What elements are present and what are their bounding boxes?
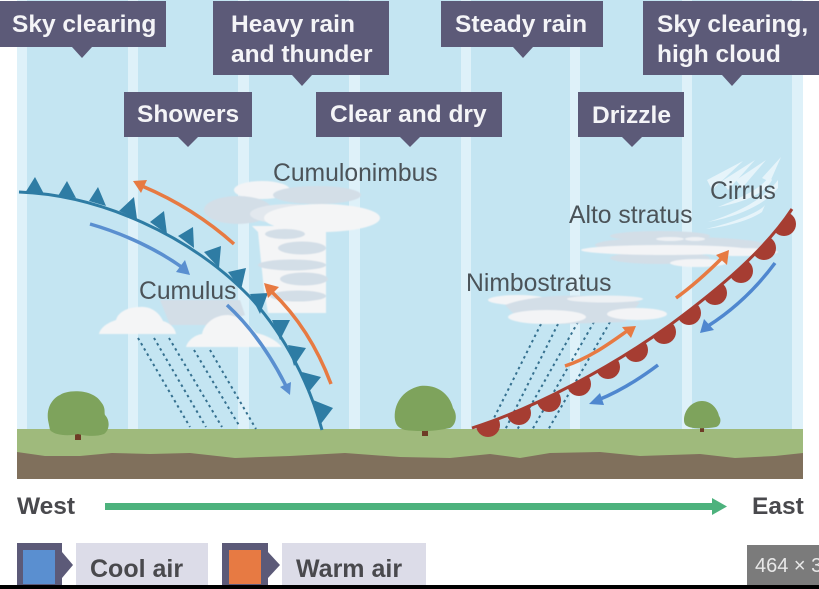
cumulus clouds <box>99 300 282 347</box>
icon: centre tree <box>395 386 456 436</box>
label: Showers: Showers <box>137 101 239 128</box>
label: Sky clearing: Sky clearing <box>12 11 156 38</box>
label: Sky clearing, high cloud: high cloud <box>657 41 781 68</box>
label: Drizzle: Drizzle <box>592 102 671 129</box>
label: Steady rain: Steady rain <box>455 11 587 38</box>
bottom black bar <box>0 585 819 589</box>
icon: east tree <box>684 401 720 432</box>
image size badge <box>747 545 819 589</box>
ground: grass and soil <box>17 429 803 479</box>
alto stratus cloud <box>581 231 778 267</box>
arrow: cool air descending, east lower <box>589 365 658 405</box>
label: Sky clearing, high cloud <box>643 1 819 86</box>
cloud label: Alto stratus: Alto stratus <box>569 202 692 229</box>
arrow: west to east direction <box>105 498 727 515</box>
cirrus cloud <box>706 157 781 229</box>
cloud label: Cirrus: Cirrus <box>710 178 776 205</box>
arrow: warm air rising, nimbostratus <box>565 326 636 366</box>
legend: cool air: Cool air <box>90 555 183 583</box>
label: Clear and dry: Clear and dry <box>330 101 487 128</box>
cold front line with triangles <box>19 177 333 430</box>
legend: warm air <box>222 543 426 589</box>
arrow: cool air descending, west <box>90 224 190 275</box>
label: Sky clearing, high cloud: Sky clearing, <box>657 11 808 38</box>
label: Drizzle <box>578 92 684 147</box>
rain: nimbostratus <box>488 322 610 430</box>
arrow: cool air descending, east upper <box>700 263 775 333</box>
icon: west tree <box>48 391 109 440</box>
arrow: warm air rising over cold front <box>133 180 234 244</box>
nimbostratus cloud <box>488 295 667 324</box>
cloud label: Cumulonimbus: Cumulonimbus <box>273 160 438 187</box>
label: Steady rain <box>441 1 603 58</box>
arrow: warm air rising, alto stratus <box>676 250 729 298</box>
arrow: cool air descending under cumulonimbus <box>227 305 291 395</box>
label: Clear and dry <box>316 92 502 147</box>
rain: cumulus showers <box>138 338 256 429</box>
panel: sky background <box>17 0 803 430</box>
legend: cool air <box>17 543 208 589</box>
label: Heavy rain and thunder: Heavy rain <box>231 11 355 38</box>
cloud label: Cumulus: Cumulus <box>139 278 236 305</box>
label: Sky clearing <box>0 1 166 58</box>
legend: warm air: Warm air <box>296 555 402 583</box>
arrow: warm air rising into cumulonimbus <box>264 283 331 384</box>
text: East: East <box>752 493 804 520</box>
label: Showers <box>124 92 252 147</box>
cloud label: Nimbostratus: Nimbostratus <box>466 270 611 297</box>
label: Heavy rain and thunder <box>213 1 389 86</box>
warm front line with semicircles <box>472 209 796 437</box>
label: Heavy rain and thunder: and thunder <box>231 41 373 68</box>
cumulonimbus cloud <box>204 181 380 313</box>
text: West: West <box>17 493 75 520</box>
